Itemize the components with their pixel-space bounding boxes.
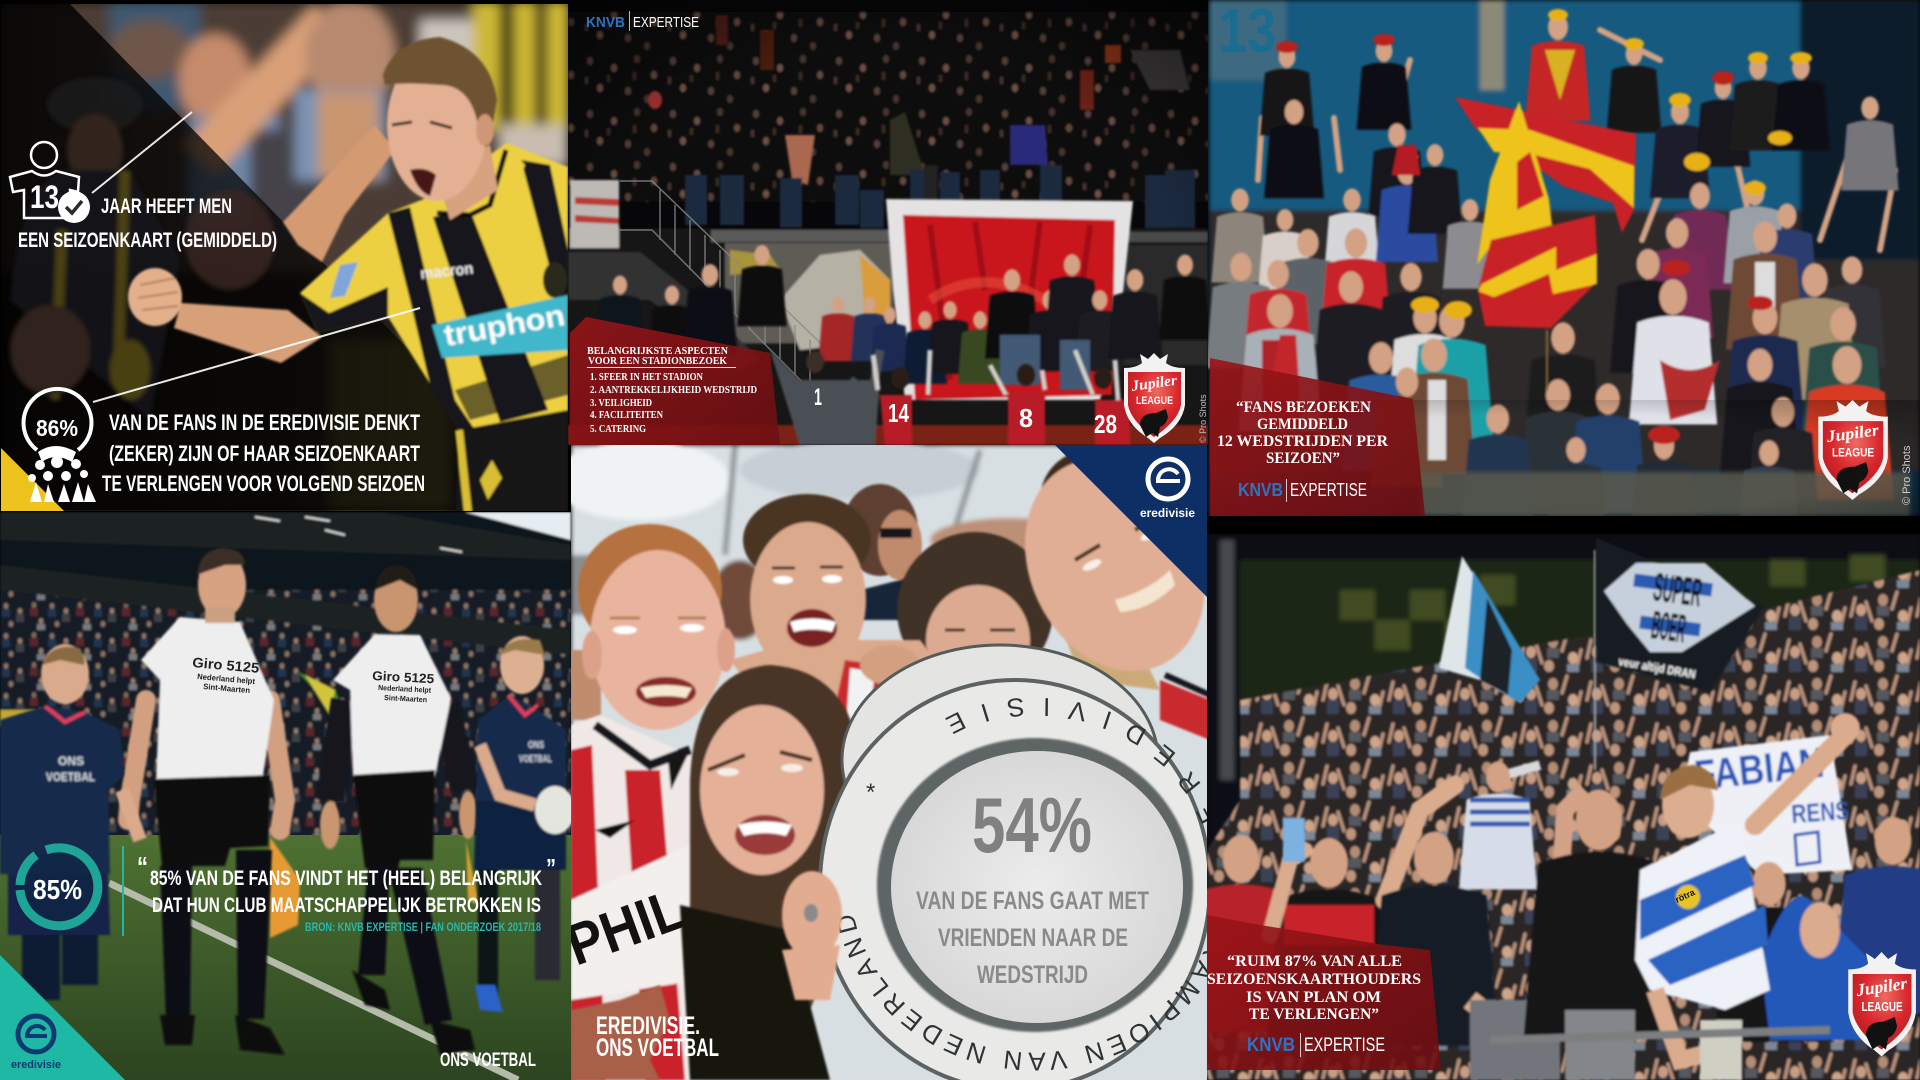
plate headline 54 percent: 54% [972,781,1092,869]
list of aspects: 2. AANTREKKELIJKHEID WEDSTRIJD [590,385,757,396]
flag: Super Boer: SUPER [1651,565,1704,616]
plate lettering: EREDIVISIE [945,698,1207,824]
logo: KNVB Expertise: EXPERTISE [1304,1035,1385,1056]
sign: Fabian [1680,735,1852,875]
shirt text right referee: Giro 5125 [372,668,435,686]
teal divider [122,846,124,936]
fan girl front [571,665,860,1080]
plate lettering: KAMPIOEN VAN NEDERLAND [839,916,1207,1070]
panel: referees and mascots, social engagement [0,512,575,1080]
plate lettering [839,698,1207,1070]
tagline: eredivisie ons voetbal [596,1012,719,1062]
shirt text left referee [192,654,260,695]
player: excited fan [128,37,568,512]
icon: crowd of fans [28,446,96,502]
heading: most important aspects: BELANGRIJKSTE ASPECTEN [587,345,728,357]
statement: 85 percent of fans: 85% VAN DE FANS VINDT HET (HEEL) BELANGRIJK [150,867,542,890]
connector lines [92,112,420,402]
list of aspects: 3. VEILIGHEID [590,398,652,409]
logo: KNVB Expertise [1247,1033,1385,1057]
quote: 87 percent renew: TE VERLENGEN” [1249,1006,1379,1023]
photo: blurred crowd background [0,0,570,515]
quote: twelve matches per season: GEMIDDELD [1257,416,1348,433]
statement: 85 percent of fans: “ [137,851,148,881]
photo: concrete, graffiti and stairs [568,180,1208,445]
shirt text right referee [372,668,435,704]
quote: 87 percent renew: IS VAN PLAN OM [1246,989,1381,1006]
fence along the front [1420,472,1910,516]
yellow corner triangle [1,448,64,511]
photo: sky background [550,440,1211,1080]
shirt numbers: 1 [814,384,822,411]
logo: eredivisie: eredivisie [1140,506,1195,520]
quote: 87 percent renew: SEIZOENSKAARTHOUDERS [1207,971,1421,988]
photo: pitch [0,835,571,1080]
badge: Jupiler League: LEAGUE [1832,446,1874,460]
plate statement: VAN DE FANS GAAT MET [916,887,1149,915]
badge: Jupiler League [1848,952,1916,1056]
shirt sponsor: PHIL: PHIL [558,876,693,978]
icon: shirt 13 with check: 13 [30,179,59,215]
shirt text left referee: Giro 5125 [192,654,260,676]
panel: fans with red and yellow flags [1206,0,1920,544]
photo: players in red shirts [568,350,1208,445]
red quote panel [1207,915,1441,1070]
text: 13 years [18,195,277,252]
ring: 85 percent: 85% [33,874,82,905]
icon: 86 percent arc: 86% [36,415,78,441]
list of aspects: 1. SFEER IN HET STADION [590,372,703,383]
list of aspects: 4. FACILITEITEN [590,410,663,421]
plate statement: WEDSTRIJD [977,961,1088,989]
logo: eredivisie [1140,459,1195,520]
credit: Pro Shots: © Pro Shots [1901,445,1913,505]
quote: twelve matches per season: SEIZOEN” [1266,450,1340,467]
quote: 87 percent renew [1207,953,1421,1023]
shirt numbers [814,388,1116,434]
statement: 85 percent of fans [137,851,556,917]
logo: eredivisie [11,1016,61,1071]
icon: shirt 13 with check [10,142,90,223]
stairs railing [620,180,821,382]
referee right [320,565,477,1055]
list of aspects [590,372,757,435]
plate: championship shield [818,644,1207,1080]
badge: Jupiler League: Jupiler [1824,420,1880,446]
tagline: eredivisie ons voetbal: ONS VOETBAL [596,1034,719,1062]
plate statement [916,887,1149,989]
photo: upper stand crowd [568,10,1208,229]
source line: BRON: KNVB EXPERTISE | FAN ONDERZOEK 2017/18 [305,920,541,934]
text: 86 percent statement: VAN DE FANS IN DE EREDIVISIE DENKT [109,410,420,435]
heading: most important aspects [587,347,728,364]
text: ons voetbal: ONS VOETBAL [440,1050,536,1071]
panel: De Graafschap fans renewal [1181,534,1920,1080]
shirt text right referee: Sint-Maarten [384,693,428,704]
plate lettering: * [866,779,875,806]
mascot boy left [0,644,140,1000]
badge: Jupiler League [1818,400,1888,500]
mascot boy right: ONS [528,740,544,751]
sign: Fabian: RENS [1790,795,1850,829]
sponsor: macron: macron [420,261,474,283]
dark diagonal overlay [1,4,458,510]
player neck and head [383,37,498,220]
shirt numbers: 28 [1094,409,1117,439]
sign: Fabian: FABIAN [1692,739,1826,799]
icon: 86 percent arc [24,389,91,450]
photo: supporters [1206,9,1899,544]
plate statement: VRIENDEN NAAR DE [938,924,1128,952]
text: 86 percent statement: TE VERLENGEN VOOR VOLGEND SEIZOEN [102,471,425,496]
fan girl behind plate [897,532,1160,695]
panel: stadium visit aspects [568,0,1211,445]
shirt numbers: 14 [888,398,909,428]
referee left [128,548,285,1055]
foreground fans [1181,713,1920,1080]
text: 13 years: JAAR HEEFT MEN [101,195,232,218]
logo: KNVB Expertise: KNVB [1238,480,1283,500]
photo: sky, roof and stand [0,512,571,850]
statement: 85 percent of fans: DAT HUN CLUB MAATSCHAPPELIJK BETROKKEN IS [152,894,541,917]
logo: KNVB Expertise: KNVB [1247,1035,1295,1056]
quote: 87 percent renew: “RUIM 87% VAN ALLE [1227,953,1402,970]
shirt text left referee: Sint-Maarten [203,682,251,695]
flag: Super Boer: BOER [1649,603,1689,652]
photo: blue stand wall [1208,0,1920,516]
text: 86 percent statement: (ZEKER) ZIJN OF HAAR SEIZOENKAART [109,441,420,466]
player shorts [455,410,568,512]
shirt numbers: 8 [1019,403,1033,433]
logo: KNVB Expertise [586,11,699,31]
quote: twelve matches per season: 12 WEDSTRIJDEN PER [1217,433,1388,450]
red info panel [570,317,780,445]
list of aspects: 5. CATERING [590,424,646,435]
teal corner triangle [0,955,125,1080]
tagline: eredivisie ons voetbal: EREDIVISIE. [596,1012,700,1040]
flags: red and yellow [1455,97,1636,390]
statement: 85 percent of fans: ” [546,853,556,883]
heading: most important aspects: VOOR EEN STADIONBEZOEK [588,355,727,367]
photo: front row fans [597,245,1211,390]
flag: Super Boer [1596,538,1765,692]
panel: season ticket fan with striped shirt [0,0,570,515]
badge: Jupiler League: LEAGUE [1862,1000,1903,1014]
fan far right [991,429,1239,740]
text: 86 percent statement [102,414,424,491]
badge: Jupiler League: Jupiler [1854,973,1909,1000]
assistant flags [270,837,478,938]
logo: KNVB Expertise: KNVB [586,14,625,31]
sponsor: truphon band: truphon [441,299,567,353]
logo: KNVB Expertise [1238,479,1367,502]
badge: Jupiler League [1124,353,1185,443]
badge: Jupiler League: LEAGUE [1136,395,1173,407]
dark spectators under overlay [10,77,275,420]
badge: Jupiler League: Jupiler [1129,373,1178,395]
mascot boy left: ONS [58,754,84,768]
mascot boy left: VOETBAL [46,770,95,784]
logo: eredivisie: eredivisie [11,1059,61,1071]
text: rotra sponsor: rötra [1674,887,1697,905]
fan centre with quiff [730,494,960,770]
quote: twelve matches per season [1217,399,1388,467]
quote: twelve matches per season: “FANS BEZOEKEN [1236,399,1371,416]
ring: 85 percent [20,848,98,926]
mascot boy right: VOETBAL [519,754,552,765]
flag: blue white black [1439,550,1595,770]
red quote panel [1210,358,1425,516]
photo: crowd [1207,570,1920,1080]
player arm and fist [128,268,322,363]
fan with sunglasses [842,484,960,620]
photo: dark back wall with checks [1207,534,1920,1080]
credit: Pro Shots: © Pro Shots [1198,394,1208,443]
navy corner with logo [1055,445,1207,597]
shirt text left referee: Nederland helpt [197,672,256,686]
fan hand holding plate [782,871,842,1000]
flag: Super Boer: veur altijd DRAN [1617,654,1697,681]
panel: PSV fans with the championship plate [571,445,1207,1080]
logo: KNVB Expertise: EXPERTISE [1290,480,1367,500]
logo: KNVB Expertise: EXPERTISE [633,14,699,31]
banner: red and white flag [886,199,1133,400]
mascot boy right [474,636,575,1012]
pitch touchline [109,883,518,1080]
shirt text right referee: Nederland helpt [378,683,432,695]
fan with PSV shirt [571,524,735,1080]
text: 13 years: EEN SEIZOENKAART (GEMIDDELD) [18,229,277,252]
player shirt [300,143,568,430]
